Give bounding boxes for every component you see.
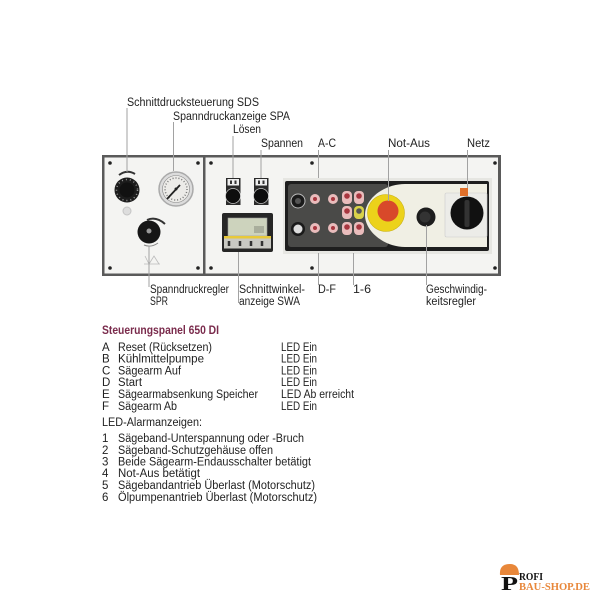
logo: Profi Bau-Shop <box>500 564 590 595</box>
callout labels: Not-Aus <box>388 138 430 150</box>
callout labels: Geschwindig- <box>426 284 487 296</box>
panel: membrane keypad <box>283 178 492 254</box>
callout labels: A-C <box>318 138 336 150</box>
table: key functions: LED Ein <box>281 366 317 378</box>
table: key functions: Reset (Rücksetzen) <box>118 342 212 354</box>
callout labels: Lösen <box>233 124 261 136</box>
screws: left plate <box>108 161 200 270</box>
panel: right plate <box>206 158 498 274</box>
list: LED alarms: Beide Sägearm-Endausschalter betätigt <box>118 456 312 468</box>
table: key functions: A <box>102 342 110 354</box>
callout labels <box>127 97 490 308</box>
callout labels: SPR <box>150 296 168 308</box>
icon: Lösen switch <box>226 178 240 205</box>
icon: Spannen switch <box>254 178 268 205</box>
icon: reset button <box>291 194 305 208</box>
table: key functions <box>102 342 355 413</box>
callout labels: Spanndruckanzeige SPA <box>173 111 290 123</box>
callout labels: Spannen <box>261 138 303 150</box>
list: LED alarms: Not-Aus betätigt <box>118 468 201 480</box>
icon: start button <box>291 222 305 236</box>
table: key functions: LED Ab erreicht <box>281 389 355 401</box>
table: key functions: F <box>102 401 109 413</box>
table: key functions: LED Ein <box>281 354 317 366</box>
icon: emergency stop <box>368 194 404 232</box>
icon: speed regulator <box>416 208 436 226</box>
icon: SPA pressure gauge <box>159 172 193 206</box>
list: LED alarms: 4 <box>102 468 109 480</box>
table: key functions: Kühlmittelpumpe <box>118 354 204 366</box>
LED key centres <box>313 193 362 230</box>
list: LED alarms: 2 <box>102 445 108 457</box>
list: LED alarms: Ölpumpenantrieb Überlast (Motorschutz) <box>118 492 317 504</box>
table: key functions: B <box>102 354 110 366</box>
callout labels: keitsregler <box>426 296 476 308</box>
table: key functions: LED Ein <box>281 401 317 413</box>
logo: Profi Bau-Shop: P <box>501 573 518 595</box>
leader lines <box>127 108 468 303</box>
icon: SWA angle display <box>222 213 273 252</box>
panel: left plate <box>104 158 203 274</box>
icon: SDS pressure knob <box>114 172 140 215</box>
callout labels: Schnittwinkel- <box>239 284 305 296</box>
subheading: LED-Alarmanzeigen: <box>102 417 202 429</box>
list: LED alarms <box>102 433 317 504</box>
list: LED alarms: 5 <box>102 480 108 492</box>
table: key functions: C <box>102 366 110 378</box>
callout labels: Spanndruckregler <box>150 284 229 296</box>
table: key functions: LED Ein <box>281 377 317 389</box>
callout labels: Netz <box>467 138 490 150</box>
table: key functions: Sägearm Ab <box>118 401 177 413</box>
callout labels: Schnittdrucksteuerung SDS <box>127 97 259 109</box>
heading: Steuerungspanel 650 DI <box>102 325 219 337</box>
logo: Profi Bau-Shop: ROFI <box>519 572 543 583</box>
table: key functions: Sägearm Auf <box>118 366 182 378</box>
control panel <box>102 155 501 276</box>
table: key functions: E <box>102 389 110 401</box>
table: key functions: D <box>102 377 110 389</box>
LED keys <box>310 191 364 235</box>
callout labels: 1-6 <box>353 284 371 296</box>
list: LED alarms: Sägeband-Schutzgehäuse offen <box>118 445 273 457</box>
list: LED alarms: Sägeband-Unterspannung oder -Bruch <box>118 433 304 445</box>
icon: mains switch <box>445 188 487 237</box>
table: key functions: Sägearmabsenkung Speicher <box>118 389 258 401</box>
logo: Profi Bau-Shop: BAU-SHOP.DE <box>519 582 590 593</box>
callout labels: anzeige SWA <box>239 296 300 308</box>
table: key functions: LED Ein <box>281 342 317 354</box>
list: LED alarms: 1 <box>102 433 108 445</box>
callout labels: D-F <box>318 284 336 296</box>
table: key functions: Start <box>118 377 143 389</box>
list: LED alarms: 6 <box>102 492 108 504</box>
list: LED alarms: Sägebandantrieb Überlast (Motorschutz) <box>118 480 315 492</box>
icon: hard hat <box>500 564 519 575</box>
list: LED alarms: 3 <box>102 456 108 468</box>
icon: SPR regulator knob <box>138 219 165 264</box>
